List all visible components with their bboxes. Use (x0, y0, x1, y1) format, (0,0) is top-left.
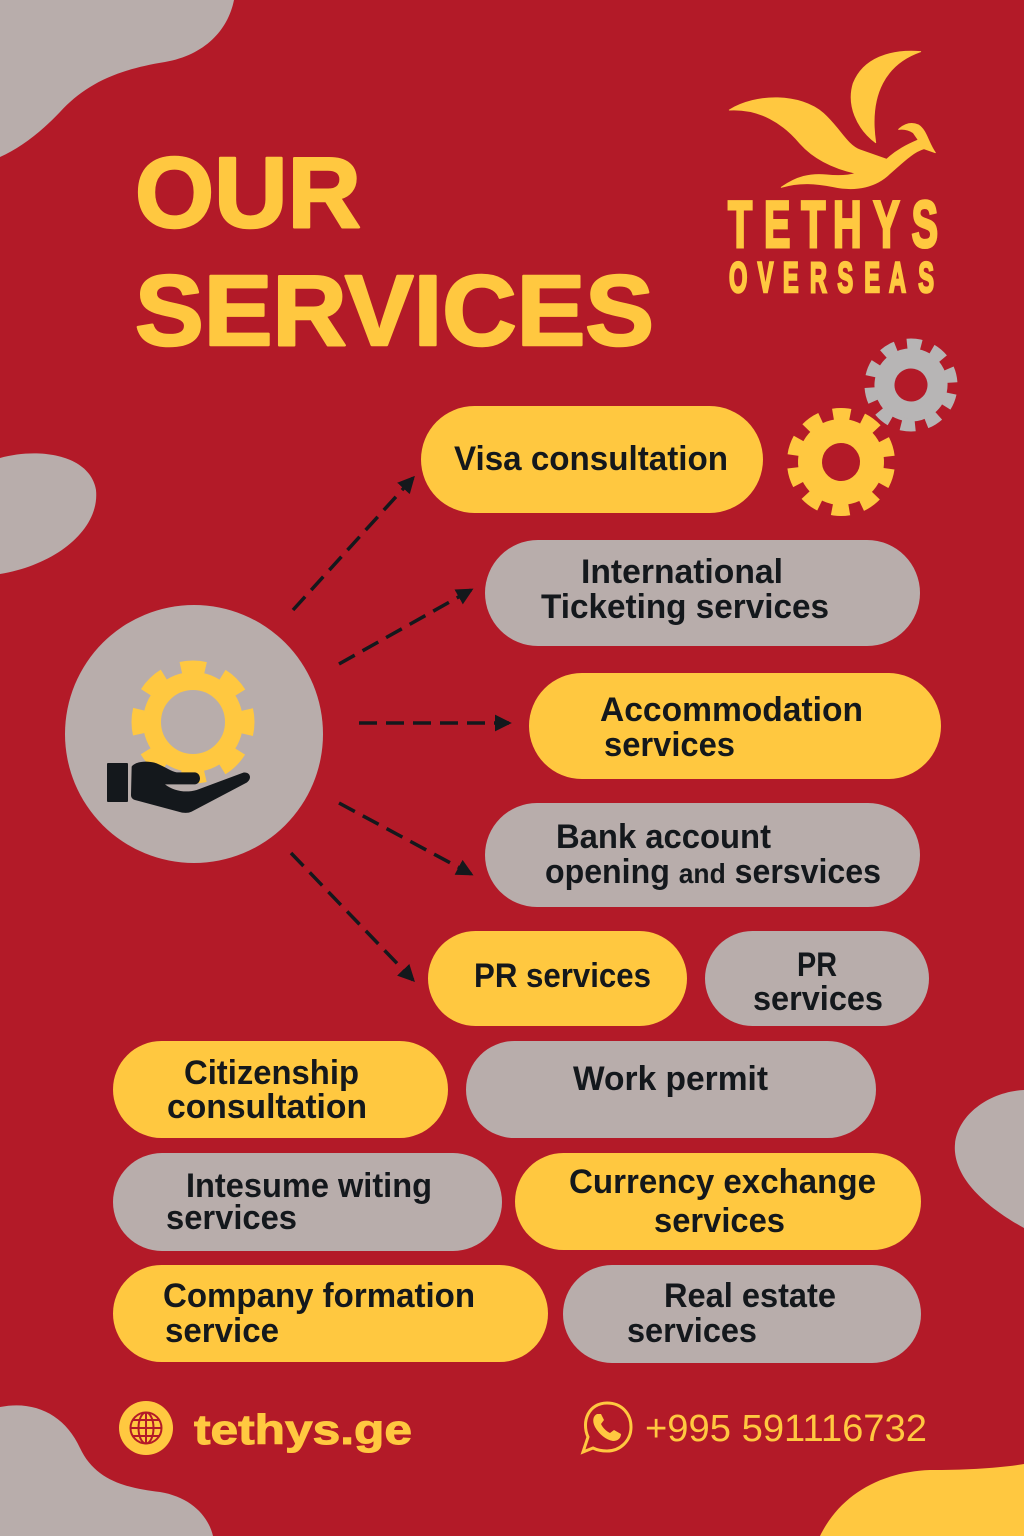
arrow: to bank account (339, 803, 471, 874)
pill: International Ticketing services: International (581, 553, 783, 591)
pill: Bank account opening and sersvices (485, 803, 920, 907)
pill: Company formation service (113, 1265, 548, 1362)
icon: large gear (138, 667, 248, 777)
icon: bird (729, 51, 935, 189)
arrows from hub to services (291, 478, 509, 980)
icon: open hand (107, 762, 250, 813)
pill: PR services yellow (428, 931, 687, 1026)
arrow: to visa consultation (293, 478, 413, 610)
logo wordmark: TETHYS: TETHYS (728, 188, 938, 262)
footer: website (119, 1401, 412, 1455)
decorative blob: top left (0, 0, 234, 157)
pill: Company formation service: Company formation (163, 1277, 475, 1315)
icon: yellow gear (788, 409, 894, 515)
title: OUR (135, 137, 361, 249)
pill: Citizenship consultation: Citizenship (184, 1054, 359, 1092)
decorative blob: bottom left (0, 1405, 213, 1536)
icon: whatsapp (583, 1403, 631, 1452)
pill: Work permit: Work permit (573, 1060, 768, 1098)
phone number: +995 591116732 (645, 1408, 927, 1450)
arrow: to accommodation (359, 721, 509, 725)
decorative blob: right (955, 1090, 1024, 1228)
title: SERVICES (135, 255, 654, 367)
pill: Accommodation services: Accommodation (600, 691, 863, 729)
pill: PR services grey: services (753, 980, 883, 1018)
decorative blob: bottom right (820, 1464, 1024, 1536)
decorative blob: left (0, 453, 96, 574)
icon: gears (788, 338, 958, 515)
pill: International Ticketing services: Ticketing services (541, 588, 829, 626)
arrow: to ticketing (339, 590, 471, 664)
pill: Intesume witing services: Intesume witing (186, 1167, 432, 1205)
pill: PR services grey (705, 931, 929, 1026)
pill: Currency exchange services: Currency exchange (569, 1163, 876, 1201)
logo wordmark: OVERSEAS: OVERSEAS (729, 255, 934, 302)
pill: PR services yellow: PR services (474, 957, 651, 995)
pill: Visa consultation (421, 406, 763, 513)
pill: Company formation service: service (165, 1312, 279, 1350)
pill: Accommodation services: services (604, 726, 735, 764)
title (135, 137, 654, 367)
pill: Intesume witing services: services (166, 1199, 297, 1237)
pill: Real estate services (563, 1265, 921, 1363)
pill: PR services grey: PR (797, 946, 837, 984)
icon: globe (119, 1401, 173, 1455)
pill: Citizenship consultation (113, 1041, 448, 1138)
arrow: to PR services (291, 853, 413, 980)
pill: Intesume witing services (113, 1153, 502, 1251)
website address: tethys.ge (194, 1406, 412, 1453)
icon: grey gear (864, 338, 958, 432)
pill: International Ticketing services (485, 540, 920, 646)
pill: Real estate services: Real estate (664, 1277, 836, 1315)
hub circle with hand and gear icon (65, 605, 323, 863)
pill: Accommodation services (529, 673, 941, 779)
logo: Tethys Overseas (728, 51, 938, 302)
pill: Work permit (466, 1041, 876, 1138)
footer: phone (583, 1403, 927, 1452)
pill: Bank account opening and sersvices: Bank account (556, 818, 771, 856)
pill: Currency exchange services: services (654, 1202, 785, 1240)
pill: Bank account opening and sersvices: opening and sersvices (545, 853, 881, 891)
pill: Currency exchange services (515, 1153, 921, 1250)
pill: Visa consultation: Visa consultation (454, 440, 728, 478)
pill: Citizenship consultation: consultation (167, 1088, 367, 1126)
pill: Real estate services: services (627, 1312, 757, 1350)
